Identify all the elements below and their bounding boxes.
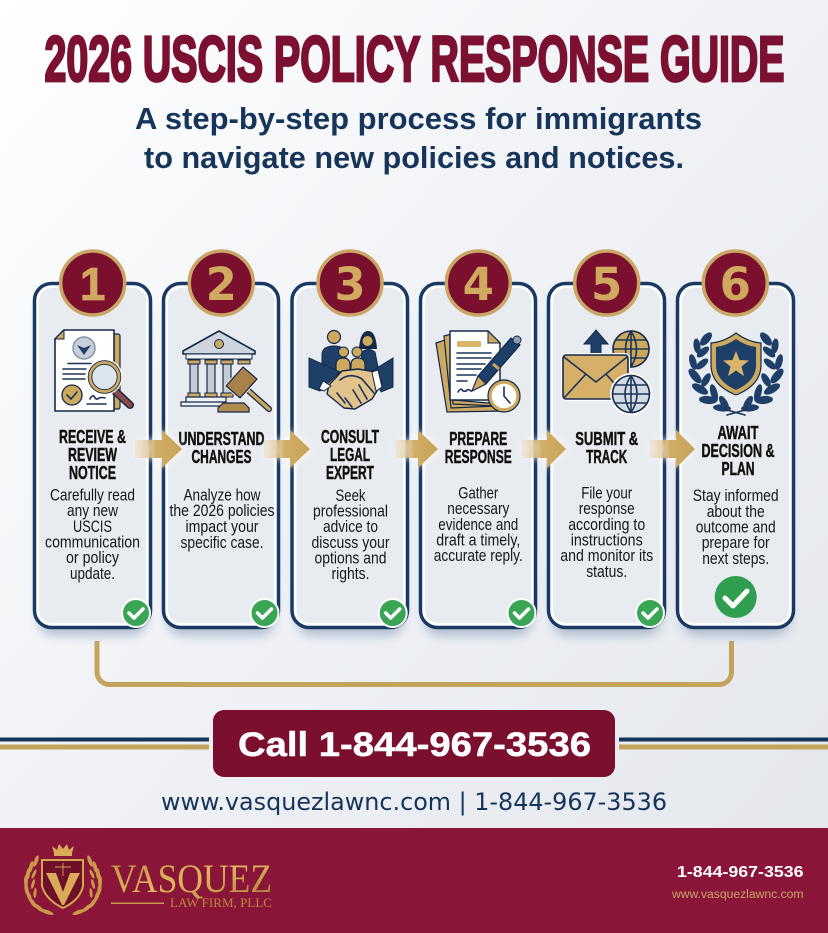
body text: specific case. bbox=[180, 534, 264, 552]
footer contact: 1-844-967-3536 bbox=[677, 864, 804, 881]
connector bracket bbox=[97, 641, 732, 684]
number badge 1 bbox=[61, 251, 125, 315]
website and phone line: www.vasquezlawnc.com | 1-844-967-3536 bbox=[161, 788, 667, 816]
body text: draft a timely, bbox=[436, 532, 520, 550]
body text: USCIS bbox=[73, 518, 112, 536]
subtitle bbox=[135, 101, 702, 175]
panel: step 2 bbox=[164, 251, 278, 636]
heading bbox=[321, 427, 379, 483]
body text bbox=[312, 487, 390, 583]
heading: AWAIT bbox=[718, 423, 759, 443]
body text: prepare for bbox=[702, 534, 770, 552]
body text: status. bbox=[586, 563, 627, 581]
heading: RESPONSE bbox=[445, 447, 512, 467]
body text bbox=[434, 484, 523, 565]
heading: RECEIVE & bbox=[59, 427, 126, 447]
body text: or policy bbox=[66, 549, 120, 567]
check badge bbox=[508, 599, 536, 627]
number badge 3: 3 bbox=[334, 258, 366, 311]
body text: File your bbox=[581, 484, 633, 502]
body text: about the bbox=[707, 503, 765, 521]
body text: Analyze how bbox=[184, 486, 261, 504]
icon: family and handshake bbox=[309, 330, 393, 409]
number badge 2 bbox=[189, 251, 253, 315]
body text bbox=[560, 484, 653, 581]
footer band bbox=[0, 828, 828, 933]
number badge 1: 1 bbox=[80, 258, 105, 310]
subtitle: A step-by-step process for immigrants bbox=[135, 101, 702, 136]
body text: any new bbox=[67, 502, 118, 520]
logo crest bbox=[24, 844, 102, 916]
arrow: step 1 to 2 bbox=[135, 430, 182, 468]
body text: update. bbox=[70, 565, 115, 583]
icon: shield and laurel bbox=[686, 330, 786, 415]
icon: courthouse and gavel bbox=[181, 331, 269, 412]
heading: CONSULT bbox=[321, 427, 379, 447]
body text: advice to bbox=[323, 518, 378, 536]
body text: next steps. bbox=[702, 550, 769, 568]
panel: step 5 bbox=[548, 251, 664, 636]
number badge 5: 5 bbox=[591, 258, 622, 311]
heading: PREPARE bbox=[449, 429, 507, 449]
heading: TRACK bbox=[586, 447, 627, 467]
body text: discuss your bbox=[312, 534, 390, 552]
panel: step 1 bbox=[34, 251, 150, 636]
heading: UNDERSTAND bbox=[178, 429, 264, 449]
body text: accurate reply. bbox=[434, 547, 523, 565]
divider lines bbox=[0, 738, 828, 750]
subtitle: to navigate new policies and notices. bbox=[144, 140, 684, 175]
heading bbox=[702, 423, 774, 479]
body text: according to bbox=[568, 516, 645, 534]
heading: LEGAL bbox=[330, 445, 370, 465]
body text: necessary bbox=[447, 500, 510, 518]
heading bbox=[575, 429, 638, 467]
body text: Stay informed bbox=[693, 487, 779, 505]
body text: impact your bbox=[186, 518, 259, 536]
call button: Call 1-844-967-3536 bbox=[238, 726, 591, 764]
icon: documents, pen and clock bbox=[436, 331, 521, 412]
heading: SUBMIT & bbox=[575, 429, 638, 449]
body text: communication bbox=[45, 534, 140, 552]
check badge bbox=[379, 599, 407, 627]
arrow: step 3 to 4 bbox=[395, 430, 438, 468]
arrow: step 4 to 5 bbox=[522, 430, 566, 468]
body text: Carefully read bbox=[50, 486, 135, 504]
heading: PLAN bbox=[722, 459, 754, 479]
footer contact bbox=[671, 864, 804, 901]
body text bbox=[170, 486, 274, 552]
heading: CHANGES bbox=[192, 447, 252, 467]
check badge bbox=[122, 599, 150, 627]
icon: notice with magnifier bbox=[55, 330, 130, 411]
body text: options and bbox=[314, 550, 386, 568]
panel: step 6 bbox=[678, 251, 794, 636]
logo wordmark: VASQUEZ bbox=[111, 856, 272, 901]
body text bbox=[693, 487, 779, 568]
heading bbox=[445, 429, 512, 467]
heading: EXPERT bbox=[326, 463, 374, 483]
arrow: step 2 to 3 bbox=[264, 430, 310, 468]
number badge 2: 2 bbox=[206, 258, 237, 311]
check badge bbox=[636, 599, 664, 627]
logo: Vasquez Law Firm bbox=[24, 844, 272, 916]
body text: and monitor its bbox=[560, 547, 653, 565]
check badge large bbox=[715, 576, 757, 618]
number badge 4: 4 bbox=[463, 258, 494, 311]
panel: step 3 bbox=[292, 251, 408, 636]
heading: NOTICE bbox=[69, 463, 116, 483]
body text: evidence and bbox=[438, 516, 518, 534]
number badge 3 bbox=[318, 251, 382, 315]
panel: step 4 bbox=[420, 251, 536, 636]
body text: rights. bbox=[332, 565, 370, 583]
number badge 4 bbox=[446, 251, 510, 315]
heading: REVIEW bbox=[68, 445, 117, 465]
heading: DECISION & bbox=[702, 441, 774, 461]
body text: Gather bbox=[458, 484, 499, 502]
body text: Seek bbox=[336, 487, 366, 505]
heading bbox=[59, 427, 126, 483]
body text: the 2026 policies bbox=[170, 502, 274, 520]
number badge 6 bbox=[703, 251, 767, 315]
body text: outcome and bbox=[696, 518, 776, 536]
heading bbox=[178, 429, 264, 467]
check badge bbox=[250, 599, 278, 627]
number badge 5 bbox=[575, 251, 639, 315]
number badge 6: 6 bbox=[720, 258, 751, 311]
footer contact: www.vasquezlawnc.com bbox=[671, 889, 804, 901]
body text: response bbox=[579, 500, 635, 518]
call button bbox=[213, 710, 615, 777]
body text bbox=[45, 486, 140, 583]
body text: professional bbox=[313, 502, 388, 520]
logo: Vasquez Law Firm: LAW FIRM, PLLC bbox=[170, 896, 272, 910]
body text: instructions bbox=[571, 532, 643, 550]
arrow: step 5 to 6 bbox=[650, 430, 695, 468]
icon: envelope, arrow and globes bbox=[563, 330, 652, 415]
